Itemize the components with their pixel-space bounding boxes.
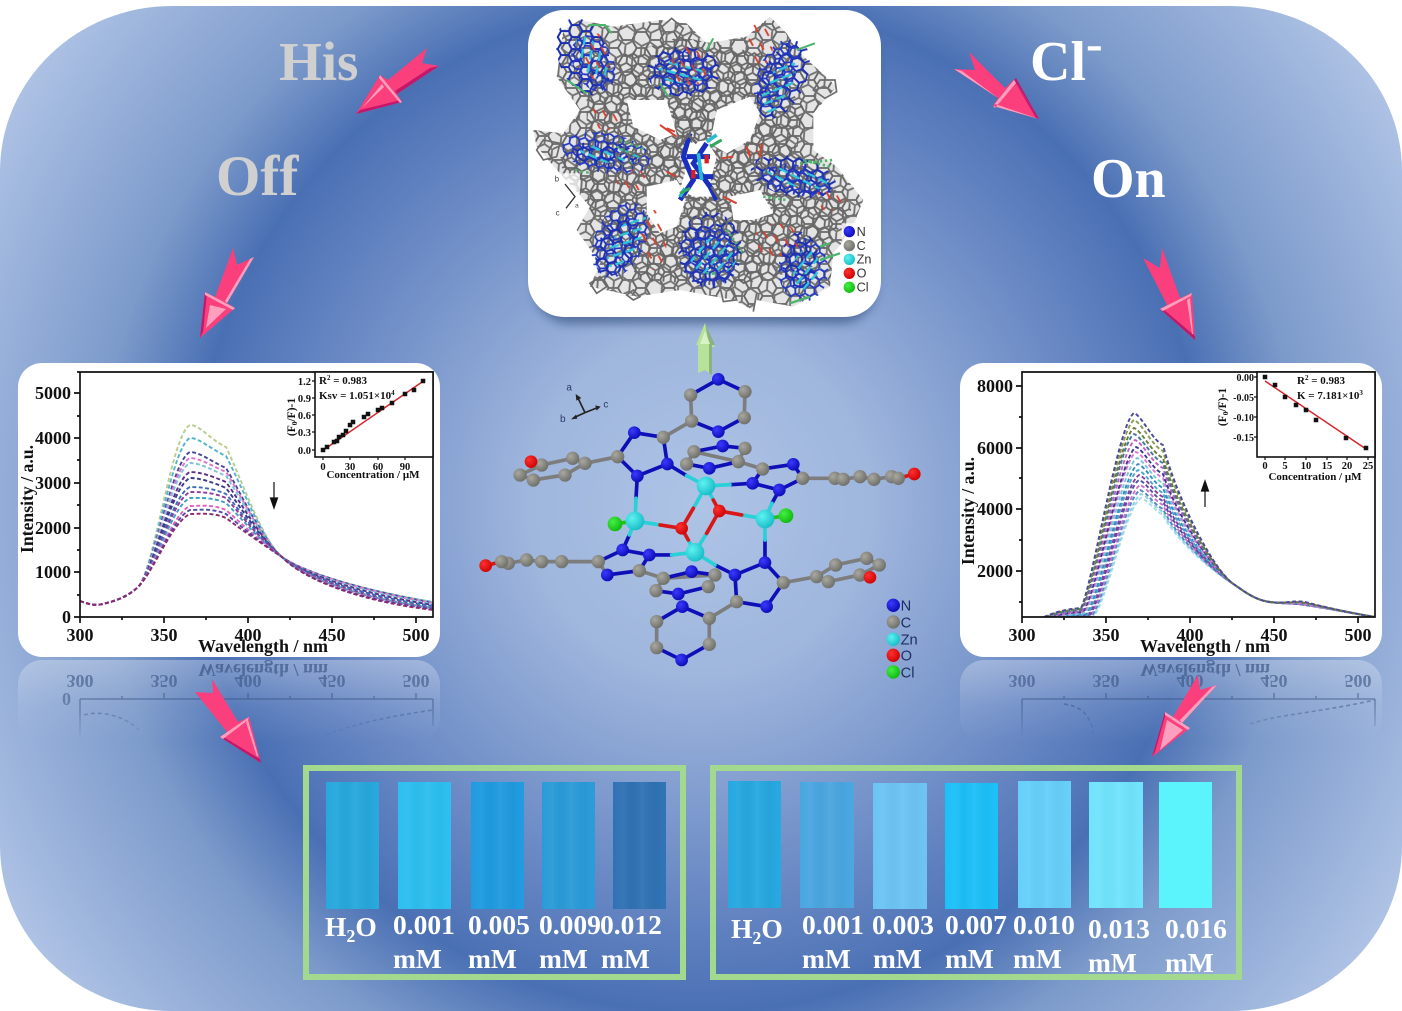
concentration labels: 0.003 [872, 909, 934, 940]
axis triad: a [575, 202, 579, 209]
y axis tick labels: 3000 [35, 473, 71, 493]
label: Off: Off [216, 145, 299, 208]
inset: Stern-Volmer plot: 0 [320, 462, 326, 473]
inset: Stern-Volmer plot: /F)-1 [286, 398, 298, 423]
concentration labels: O [355, 911, 377, 942]
cluster: left [559, 103, 654, 191]
bonds [486, 379, 914, 660]
inset: Stern-Volmer plot: 90 [400, 462, 410, 473]
cluster: bottom right [753, 223, 840, 303]
inset: linear fit plot: 15 [1322, 461, 1332, 472]
inset: linear fit plot: Concentration / μM [1268, 471, 1362, 483]
axis triad: c [603, 399, 608, 410]
inset: linear fit plot [1217, 372, 1375, 483]
inset: linear fit plot: 0 [1221, 411, 1230, 415]
inset: linear fit plot: 0 [1262, 461, 1268, 472]
concentration labels: mM [1088, 947, 1137, 978]
concentration labels: mM [539, 943, 588, 974]
y axis tick labels: 8000 [977, 376, 1013, 396]
reflection: left chart: 500 [402, 671, 430, 691]
concentration labels: mM [873, 943, 922, 974]
concentration labels: 0.005 [468, 909, 530, 940]
inset: Stern-Volmer plot: 0 [290, 421, 299, 425]
reflection: left chart: 450 [318, 671, 346, 691]
inset: Stern-Volmer plot: 2 [327, 374, 331, 382]
label: On: On [1091, 148, 1166, 210]
x axis title: Wavelength / nm [198, 636, 328, 656]
spectra curves [80, 425, 433, 610]
element legend: C [901, 615, 912, 631]
y axis tick labels: 2000 [35, 518, 71, 538]
inset: Stern-Volmer plot: 60 [373, 462, 383, 473]
concentration labels: mM [601, 943, 650, 974]
axis triad [560, 383, 608, 425]
chlorine atoms [608, 508, 793, 531]
axis triad: c [556, 208, 560, 217]
inset: linear fit plot: 20 [1342, 461, 1352, 472]
element legend: Zn [857, 253, 871, 267]
x axis tick labels: 300 [1008, 625, 1036, 645]
y axis tick labels: 0 [62, 607, 71, 627]
inset: linear fit plot: 2 [1305, 374, 1309, 382]
cluster: top right [745, 20, 821, 127]
lattice network [533, 11, 873, 312]
concentration labels: 2 [752, 928, 761, 948]
axes and frame [1016, 372, 1375, 623]
nitrogen atoms [601, 373, 800, 666]
concentration labels [731, 909, 1227, 978]
test strips [728, 781, 1212, 909]
reflection: left chart: Wavelength / nm [198, 660, 328, 680]
spectra curves [1044, 413, 1375, 617]
concentration labels [325, 909, 662, 974]
inset: linear fit plot: R [1297, 375, 1305, 387]
axis triad: b [560, 414, 566, 425]
arrow: Cl to On pointer [954, 52, 1039, 119]
reflection: right chart [960, 660, 1382, 730]
y axis tick labels: 4000 [35, 428, 71, 448]
axis triad [552, 173, 580, 217]
x axis tick labels: 450 [1260, 625, 1288, 645]
x axis tick labels: 500 [402, 625, 430, 645]
concentration labels: O [761, 913, 783, 944]
reflection: left chart: 0 [62, 689, 71, 709]
concentration labels: 0.001 [393, 909, 455, 940]
inset: Stern-Volmer plot: R [319, 375, 327, 387]
panel: turn-on emission spectra [958, 363, 1382, 657]
y axis tick labels: 1000 [35, 562, 71, 582]
inset: Stern-Volmer plot: Concentration / μM [326, 469, 420, 481]
arrow: green up arrow [696, 323, 715, 375]
reflection: right chart: 350 [1092, 671, 1120, 691]
inset: linear fit plot: 10 [1301, 461, 1311, 472]
inset: linear fit plot: -0.10 [1233, 413, 1254, 424]
panel: His test strips [306, 768, 683, 977]
concentration labels: mM [945, 943, 994, 974]
concentration labels: mM [802, 943, 851, 974]
element legend: O [857, 267, 867, 281]
reflection: left chart: 400 [234, 671, 262, 691]
inset: linear fit plot: -0.05 [1233, 393, 1254, 404]
reflection: right chart: Wavelength / nm [1140, 660, 1270, 680]
reflection: right chart: 500 [1344, 671, 1372, 691]
panel: crystal packing structure [528, 10, 881, 317]
concentration labels: 0.016 [1165, 913, 1227, 944]
inset: linear fit plot: 0.00 [1236, 373, 1254, 384]
zinc atoms [626, 477, 774, 562]
label: Cl-: Cl [1030, 31, 1086, 93]
central core [677, 133, 722, 200]
inset: Stern-Volmer plot: 0.3 [298, 428, 311, 439]
y axis title: Intensity / a.u. [17, 445, 37, 553]
y axis tick labels: 6000 [977, 438, 1013, 458]
inset: linear fit plot: /F)-1 [1217, 388, 1229, 413]
concentration labels: 2 [346, 926, 355, 946]
x axis tick labels: 300 [66, 625, 94, 645]
x axis tick labels: 500 [1344, 625, 1372, 645]
arrow: His to Off pointer [356, 48, 439, 114]
arrow: right spectra to strips [1152, 675, 1217, 757]
cluster: top [647, 38, 720, 97]
oxygen atoms [479, 455, 921, 584]
panel: Cl test strips [713, 768, 1239, 978]
element legend: O [901, 649, 912, 665]
x axis tick labels: 450 [318, 625, 346, 645]
x axis tick labels: 400 [234, 625, 262, 645]
inset: Stern-Volmer plot: 1.2 [298, 377, 311, 388]
concentration labels: mM [1013, 943, 1062, 974]
inset: Stern-Volmer plot: 0.6 [298, 411, 311, 422]
panel: quenching emission spectra [17, 363, 440, 657]
x axis tick labels: 350 [150, 625, 178, 645]
inset: linear fit plot: -0.15 [1233, 433, 1254, 444]
axes and frame [74, 372, 433, 623]
reflection: right chart: 450 [1260, 671, 1288, 691]
element legend [842, 223, 873, 295]
concentration labels: mM [393, 943, 442, 974]
x axis tick labels [1008, 625, 1372, 645]
inset: Stern-Volmer plot: = 0.983 [330, 375, 367, 387]
x axis title: Wavelength / nm [1140, 636, 1270, 656]
test strips [326, 782, 666, 909]
element legend: Zn [901, 633, 918, 649]
reflection: left chart [18, 660, 440, 732]
element legend: N [901, 599, 911, 615]
cluster: bottom [678, 212, 743, 288]
arrow: increasing intensity [1202, 481, 1208, 507]
element legend: N [857, 225, 866, 239]
outer fragments [537, 18, 837, 312]
axis triad: a [566, 383, 572, 394]
inset: Stern-Volmer plot: 4 [391, 389, 395, 397]
arrow: Off to spectra [200, 248, 254, 338]
x axis tick labels: 400 [1176, 625, 1204, 645]
concentration labels: 0.010 [1013, 909, 1075, 940]
inset: Stern-Volmer plot [286, 372, 433, 481]
inset: linear fit plot: 25 [1363, 461, 1373, 472]
element legend: Cl [857, 281, 869, 295]
axis triad: b [555, 175, 560, 184]
y axis tick labels: 4000 [977, 499, 1013, 519]
concentration labels: mM [1165, 947, 1214, 978]
cluster: right [743, 141, 848, 211]
inset: linear fit plot: = 0.983 [1308, 375, 1345, 387]
inset: linear fit plot: K = 7.181×10 [1297, 390, 1359, 402]
inset: Stern-Volmer plot: (F [286, 425, 298, 436]
y axis tick labels: 2000 [977, 561, 1013, 581]
molecule: Zn cluster ball and stick [479, 373, 921, 681]
inset: Stern-Volmer plot: Ksv = 1.051×10 [319, 390, 391, 402]
inset: linear fit plot: (F [1217, 415, 1229, 426]
concentration labels: 0.009 [539, 909, 601, 940]
concentration labels: H [731, 913, 752, 944]
inset: Stern-Volmer plot: 0.9 [298, 394, 311, 405]
concentration labels: 0.001 [802, 909, 864, 940]
inset: Stern-Volmer plot: 0.0 [298, 446, 311, 457]
concentration labels: H [325, 911, 346, 942]
element legend: C [857, 239, 866, 253]
x axis tick labels: 350 [1092, 625, 1120, 645]
cluster: top left [546, 11, 624, 103]
carbon atoms [495, 385, 905, 654]
reflection: left chart: 350 [150, 671, 178, 691]
y axis tick labels: 5000 [35, 383, 71, 403]
radiating arms [613, 100, 783, 227]
concentration labels: 0.007 [945, 909, 1007, 940]
element legend: Cl [901, 665, 914, 681]
reflection: left chart: 300 [66, 671, 94, 691]
cluster: bottom left [580, 193, 667, 287]
label: His: His [279, 31, 358, 92]
arrow: decreasing intensity [270, 482, 278, 508]
inset: linear fit plot: 3 [1359, 389, 1363, 397]
y axis tick labels [35, 383, 71, 627]
element legend [887, 599, 918, 681]
reflection: right chart: 300 [1008, 671, 1036, 691]
concentration labels: 0.013 [1088, 913, 1150, 944]
inset: Stern-Volmer plot: 30 [345, 462, 355, 473]
shadow: crystal packing panel [534, 22, 876, 324]
label: Cl-: - [1086, 15, 1103, 71]
concentration labels: mM [468, 943, 517, 974]
inset: linear fit plot: 5 [1282, 461, 1288, 472]
gray framework [533, 17, 863, 310]
arrow: On to spectra [1143, 248, 1195, 340]
x axis tick labels [66, 625, 430, 645]
reflection: right chart: 400 [1176, 671, 1204, 691]
y axis tick labels [977, 376, 1013, 581]
arrow: left spectra to strips [195, 679, 261, 763]
y axis title: Intensity / a.u. [958, 457, 978, 565]
concentration labels: 0.012 [600, 909, 662, 940]
